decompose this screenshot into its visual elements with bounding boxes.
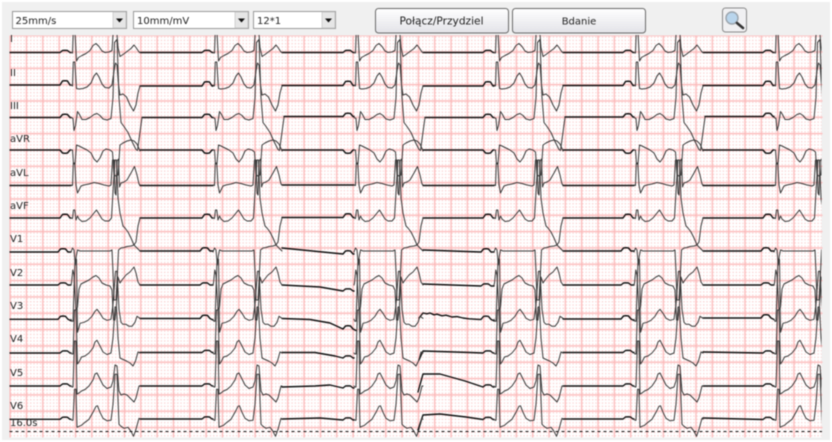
select: paper speed: 25mm/s bbox=[16, 16, 56, 27]
lead labels: I bbox=[10, 34, 13, 45]
select: paper speed bbox=[12, 12, 126, 28]
button: examination: Bdanie bbox=[562, 16, 596, 28]
lead labels: III bbox=[10, 101, 19, 112]
lead V3 trace bbox=[9, 259, 832, 332]
lead aVR trace bbox=[9, 140, 832, 176]
elapsed time label: 16.0s bbox=[10, 418, 37, 429]
lead labels: II bbox=[10, 68, 16, 79]
lead I trace bbox=[8, 34, 822, 62]
lead labels: V6 bbox=[10, 401, 23, 412]
select: gain bbox=[134, 12, 248, 28]
lead III trace bbox=[9, 40, 832, 150]
select: lead layout: 12*1 bbox=[257, 16, 281, 27]
lead II trace bbox=[9, 62, 832, 111]
button: connect/assign: Połącz/Przydziel bbox=[399, 16, 484, 28]
lead labels: V5 bbox=[10, 368, 23, 379]
lead labels: aVF bbox=[10, 201, 29, 212]
select: gain: 10mm/mV bbox=[137, 16, 189, 27]
lead labels: aVR bbox=[10, 134, 30, 145]
lead labels: aVL bbox=[10, 168, 29, 179]
lead aVL trace bbox=[9, 159, 832, 195]
lead labels: V4 bbox=[10, 334, 23, 345]
lead labels: V2 bbox=[10, 268, 23, 279]
lead aVF trace bbox=[9, 160, 832, 245]
icon: magnifier button bbox=[722, 8, 746, 32]
lead labels: V1 bbox=[10, 234, 23, 245]
select: lead layout bbox=[254, 12, 336, 28]
lead labels bbox=[10, 34, 30, 412]
lead V4 trace bbox=[9, 307, 832, 366]
lead V6 trace bbox=[9, 374, 832, 436]
button: examination bbox=[512, 8, 646, 33]
lead V5 trace bbox=[9, 341, 832, 402]
time marker dashed line bbox=[10, 430, 822, 432]
lead V1 trace bbox=[9, 245, 832, 300]
lead labels: V3 bbox=[10, 301, 23, 312]
lead V2 trace bbox=[9, 267, 832, 320]
button: connect/assign bbox=[376, 8, 508, 33]
